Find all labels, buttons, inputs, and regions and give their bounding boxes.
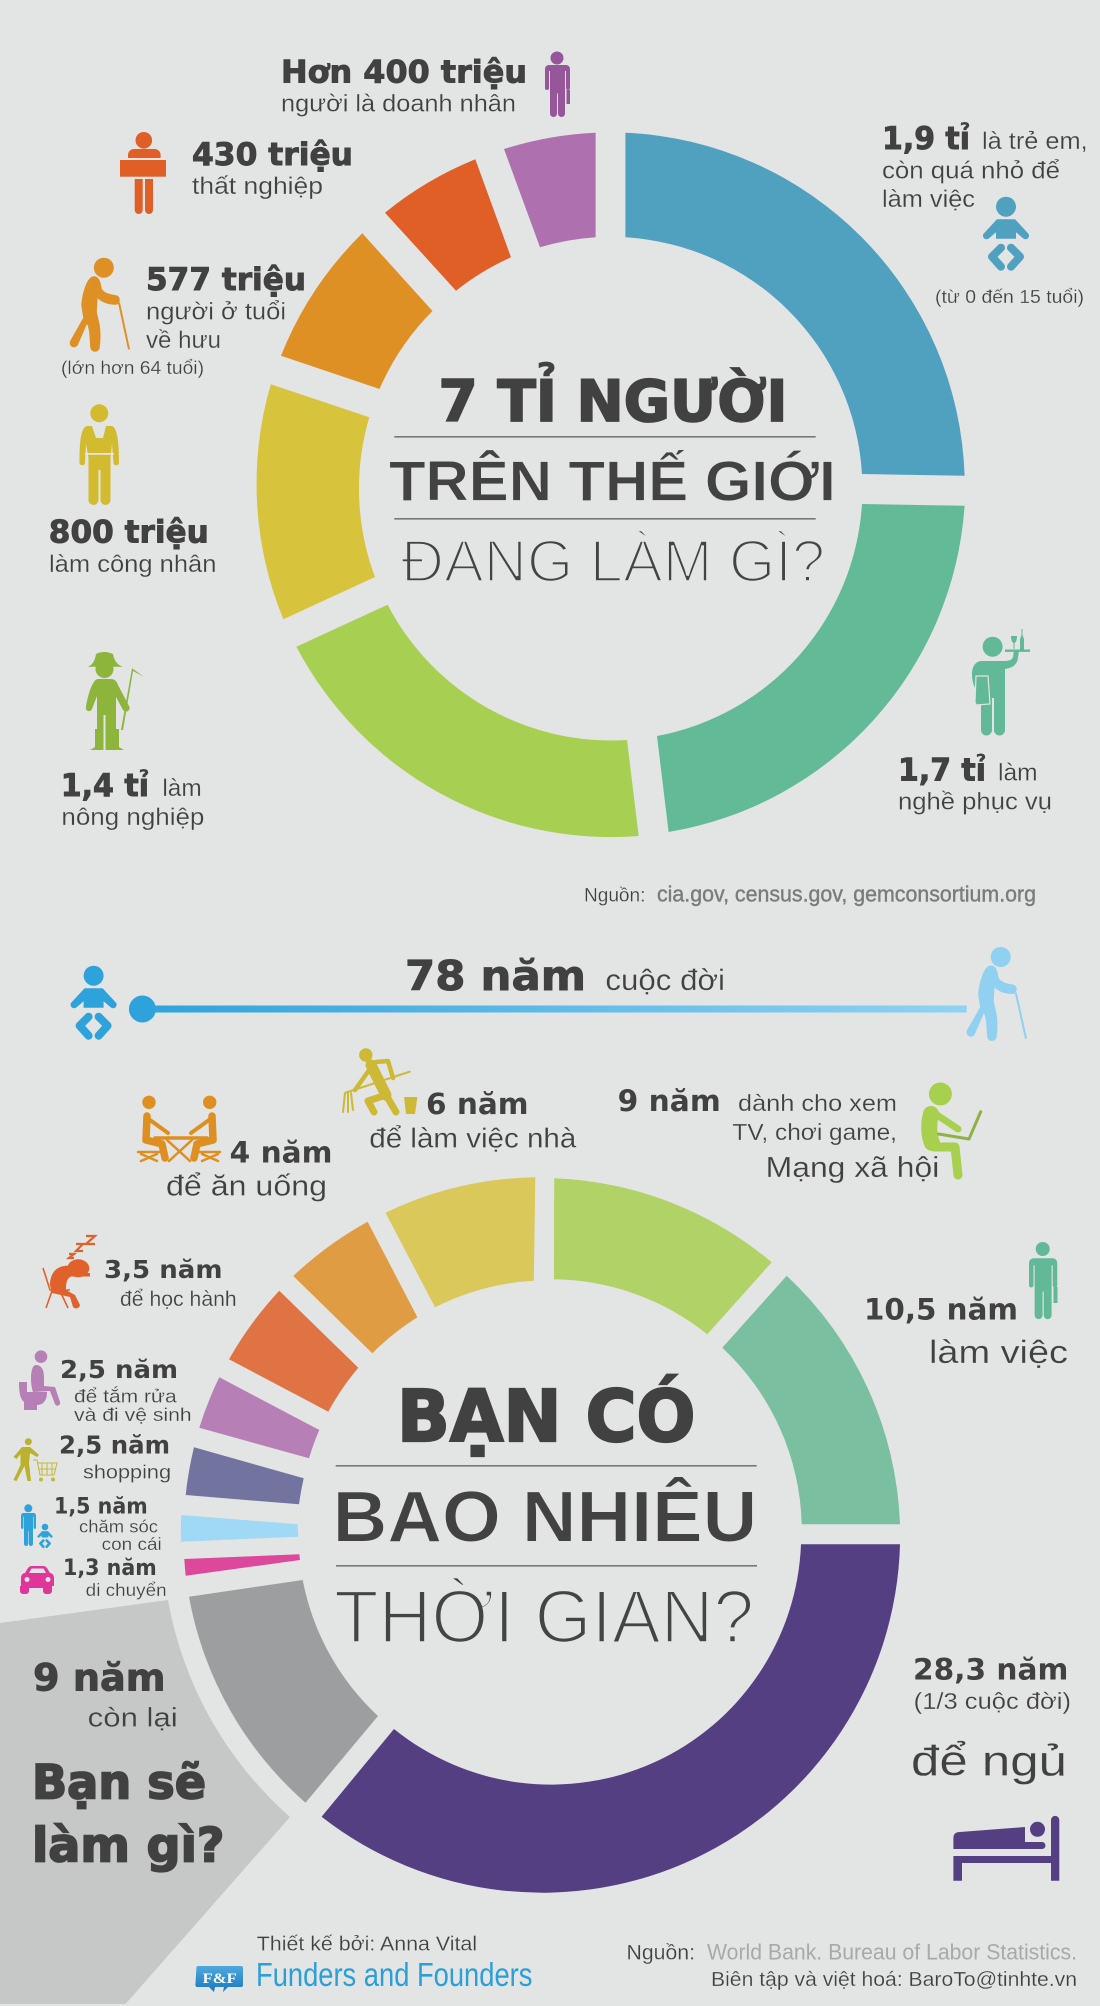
label: media: dành cho xem (738, 1090, 897, 1116)
label: bathroom: và đi vệ sinh (74, 1405, 192, 1425)
label: housework: 6 năm (426, 1087, 529, 1121)
label: media (618, 1084, 939, 1184)
label: commuting: di chuyển (86, 1580, 167, 1600)
heading: 78 years of life: 78 năm (405, 952, 586, 1000)
icon: businessman (545, 52, 570, 117)
panel: footer credits (195, 1934, 1077, 1993)
icon: car (20, 1566, 54, 1594)
label: sleep: (1/3 cuộc đời) (914, 1688, 1071, 1714)
source line 1: Nguồn: (584, 885, 645, 907)
heading: 78 years of life: cuộc đời (605, 964, 725, 997)
label: childcare: con cái (102, 1534, 162, 1554)
label: shopping: 2,5 năm (59, 1430, 170, 1459)
label: study: 3,5 năm (104, 1255, 222, 1284)
label: agriculture (61, 768, 204, 831)
segment: bathroom 2.5 years (199, 1377, 319, 1458)
segment: workers 800 million (257, 384, 375, 619)
label: services (898, 753, 1052, 815)
label: children: làm việc (882, 186, 975, 213)
icon: waiter with tray (972, 629, 1030, 736)
label: retired (61, 262, 306, 378)
icon: person on toilet (19, 1350, 60, 1410)
segment: work 10.5 years (722, 1276, 900, 1524)
segment: entrepreneurs 400 million (504, 133, 596, 247)
title: bạn có bao nhiêu thời gian: BAO NHIÊU (333, 1477, 757, 1558)
label: childcare: chăm sóc (79, 1516, 158, 1536)
label: work: làm việc (929, 1334, 1068, 1370)
label: media: TV, chơi game, (732, 1119, 897, 1145)
segment: remaining 9 years (189, 1580, 378, 1803)
label: workers: 800 triệu (49, 515, 209, 551)
segment: housework 6 years (386, 1177, 535, 1307)
icon: sleeping student (43, 1236, 95, 1308)
label: remaining years callout (32, 1657, 225, 1874)
label: media: Mạng xã hội (766, 1152, 939, 1184)
label: children: 1,9 tỉ (882, 121, 970, 157)
segment: childcare 1.5 years (181, 1515, 298, 1542)
label: remaining years callout: 9 năm (33, 1657, 166, 1700)
segment: unemployed 430 million (385, 159, 511, 291)
label: retired: 577 triệu (146, 262, 306, 298)
icon: elder at end of life (967, 947, 1026, 1040)
title: bạn có bao nhiêu thời gian (333, 1375, 757, 1659)
label: eating (166, 1136, 332, 1203)
icon: person with laptop (929, 1082, 981, 1175)
text: editor credit: Biên tập và việt hoá: BaroTo@tinhte.vn (711, 1968, 1077, 1991)
panel: 78-year lifeline (71, 947, 1026, 1040)
icon: shopper with cart (14, 1438, 57, 1482)
source line 2: World Bank. Bureau of Labor Statistics. (707, 1939, 1077, 1964)
segment: sleep 28.3 years (322, 1544, 900, 1893)
label: unemployed (192, 137, 353, 200)
label: entrepreneurs: người là doanh nhân (281, 91, 516, 118)
label: remaining years callout: Bạn sẽ (32, 1755, 206, 1810)
logo: F&F speech bubbles: F&F (203, 1971, 237, 1987)
icon: baby (983, 197, 1029, 267)
icon: farmer with hoe (86, 652, 144, 752)
segment: children 1.9 billion (625, 133, 965, 476)
label: children: (từ 0 đến 15 tuổi) (935, 287, 1084, 307)
label: work (864, 1292, 1068, 1370)
label: bathroom: để tắm rửa (74, 1386, 178, 1407)
text: designer credit: Thiết kế bởi: Anna Vital (257, 1934, 477, 1956)
label: sleep: 28,3 năm (913, 1652, 1068, 1686)
label: retired: về hưu (146, 327, 221, 354)
label: services: nghề phục vụ (898, 788, 1052, 815)
label: study: để học hành (120, 1288, 237, 1311)
icon: retired elder with cane (70, 258, 129, 351)
label: agriculture: 1,4 tỉ (61, 768, 149, 804)
label: retired: (lớn hơn 64 tuổi) (61, 358, 204, 378)
label: retired: người ở tuổi (146, 298, 286, 325)
segment: agriculture 1.4 billion (296, 605, 639, 837)
label: bathroom (60, 1355, 192, 1425)
title: bạn có bao nhiêu thời gian: THỜI GIAN? (334, 1575, 754, 1659)
label: remaining years callout: làm gì? (32, 1819, 225, 1874)
label: housework (369, 1087, 577, 1153)
donut chart: world population by occupation (257, 133, 965, 837)
label: agriculture: nông nghiệp (61, 804, 204, 831)
label: commuting: 1,3 năm (63, 1556, 157, 1581)
segment: eating 4 years (293, 1222, 417, 1353)
icon: people eating at table (138, 1096, 220, 1161)
source line 1: cia.gov, census.gov, gemconsortium.org (657, 882, 1036, 907)
label: agriculture: làm (162, 775, 202, 802)
label: children (882, 121, 1088, 307)
label: media: 9 năm (618, 1084, 721, 1118)
label: services: 1,7 tỉ (898, 753, 986, 789)
label: workers: làm công nhân (49, 551, 216, 578)
segment: retired 577 million (281, 233, 432, 389)
icon: office worker with briefcase (1029, 1242, 1058, 1319)
segment: services 1.7 billion (657, 504, 965, 832)
label: childcare (54, 1494, 162, 1554)
label: shopping: shopping (83, 1462, 171, 1483)
icon: unemployed person holding sign (120, 132, 166, 214)
logo: F&F speech bubbles (195, 1966, 243, 1992)
icon: parent and child (21, 1504, 53, 1547)
icon: person mopping (343, 1048, 417, 1114)
text: Funders and Founders: Funders and Founders (256, 1956, 532, 1993)
title: 7 tỉ người trên thế giới đang làm gì: TRÊN THẾ GIỚI (389, 449, 836, 514)
segment: media 9 years (554, 1178, 772, 1334)
label: sleep (911, 1652, 1071, 1786)
title: 7 tỉ người trên thế giới đang làm gì (389, 362, 836, 594)
label: workers (49, 515, 216, 578)
segment: shopping 2.5 years (186, 1447, 304, 1504)
segment: commuting 1.3 years (184, 1554, 300, 1576)
label: work: 10,5 năm (864, 1292, 1018, 1326)
source line 2: Nguồn: (626, 1941, 695, 1964)
label: eating: 4 năm (230, 1136, 332, 1170)
title: bạn có bao nhiêu thời gian: BẠN CÓ (397, 1375, 696, 1458)
label: entrepreneurs: Hơn 400 triệu (281, 55, 527, 91)
label: services: làm (998, 760, 1038, 787)
icon: baby at start of life (71, 966, 117, 1036)
panel: 7 billion people donut section (49, 52, 1088, 907)
icon: bed (953, 1816, 1059, 1881)
donut chart: life time breakdown (181, 1177, 900, 1893)
title: 7 tỉ người trên thế giới đang làm gì: 7 TỈ NGƯỜI (438, 362, 788, 435)
label: unemployed: 430 triệu (192, 137, 353, 173)
label: bathroom: 2,5 năm (60, 1355, 178, 1384)
label: eating: để ăn uống (166, 1171, 327, 1203)
label: remaining years callout: còn lại (88, 1703, 178, 1733)
label: study (104, 1255, 237, 1311)
label: entrepreneurs (281, 55, 527, 118)
segment: study 3.5 years (229, 1291, 358, 1412)
label: unemployed: thất nghiệp (192, 173, 323, 200)
title: 7 tỉ người trên thế giới đang làm gì: ĐANG LÀM GÌ? (401, 528, 825, 594)
label: childcare: 1,5 năm (54, 1494, 148, 1519)
label: commuting (63, 1556, 167, 1600)
label: shopping (59, 1430, 171, 1483)
heading: 78 years of life (405, 952, 725, 1000)
label: sleep: để ngủ (911, 1738, 1067, 1786)
label: children: còn quá nhỏ để (882, 157, 1060, 184)
icon: construction worker (80, 404, 119, 505)
panel: how much time do you have donut section (0, 1048, 1071, 2004)
decorative wedge: remaining 9 years (0, 1600, 290, 2004)
lifeline bar (129, 996, 967, 1022)
label: housework: để làm việc nhà (369, 1122, 577, 1153)
label: children: là trẻ em, (982, 128, 1088, 155)
